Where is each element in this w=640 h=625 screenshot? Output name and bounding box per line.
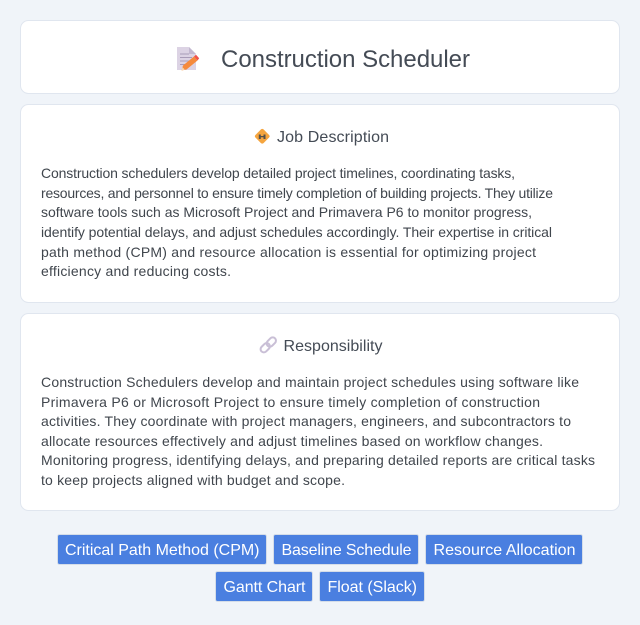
panel: responsibility	[20, 314, 620, 510]
tag: gantt chart	[216, 572, 312, 602]
tag: resource allocation	[426, 534, 582, 564]
job description text: path method (CPM) and resource allocation is essential for optimizing project	[41, 244, 536, 260]
heading: responsibility: Responsibility	[284, 338, 382, 355]
job description text	[41, 165, 553, 279]
icon: construction diamond	[254, 128, 270, 144]
heading: job description: Job Description	[277, 129, 389, 146]
job description text: Construction schedulers develop detailed project timelines, coordinating tasks,	[41, 165, 515, 181]
job description text: resources, and personnel to ensure timely completion of building projects. They utilize	[41, 185, 553, 201]
responsibility text: allocate resources effectively and adjust timelines based on workflow changes.	[41, 433, 543, 449]
title text: Construction Scheduler	[221, 46, 470, 73]
responsibility text: Primavera P6 or Microsoft Project to ensure timely completion of construction	[41, 394, 540, 410]
panel: title	[20, 20, 620, 94]
job description text: identify potential delays, and adjust schedules accordingly. Their expertise in critical	[41, 224, 552, 240]
responsibility text: Construction Schedulers develop and maintain project schedules using software like	[41, 374, 579, 390]
tag: gantt chart: Gantt Chart	[224, 579, 306, 596]
responsibility text	[41, 374, 595, 488]
tag: baseline schedule: Baseline Schedule	[282, 542, 412, 559]
tag: float slack: Float (Slack)	[328, 579, 417, 596]
responsibility text: activities. They coordinate with project managers, engineers, and subcontractors to	[41, 413, 571, 429]
icon: chain link	[259, 336, 277, 354]
tag: baseline schedule	[274, 534, 418, 564]
tag: float slack	[320, 572, 424, 602]
tag: critical path method	[58, 534, 266, 564]
responsibility text: Monitoring progress, identifying delays, and preparing detailed reports are critical tasks	[41, 452, 595, 468]
tag: resource allocation: Resource Allocation	[434, 542, 576, 559]
tag: critical path method: Critical Path Method (CPM)	[65, 542, 260, 559]
job description text: efficiency and reducing costs.	[41, 263, 231, 279]
job description text: software tools such as Microsoft Project and Primavera P6 to monitor progress,	[41, 204, 532, 220]
icon: memo and pencil	[177, 47, 199, 70]
panel: job description	[20, 104, 620, 302]
responsibility text: to keep projects aligned with budget and scope.	[41, 472, 345, 488]
